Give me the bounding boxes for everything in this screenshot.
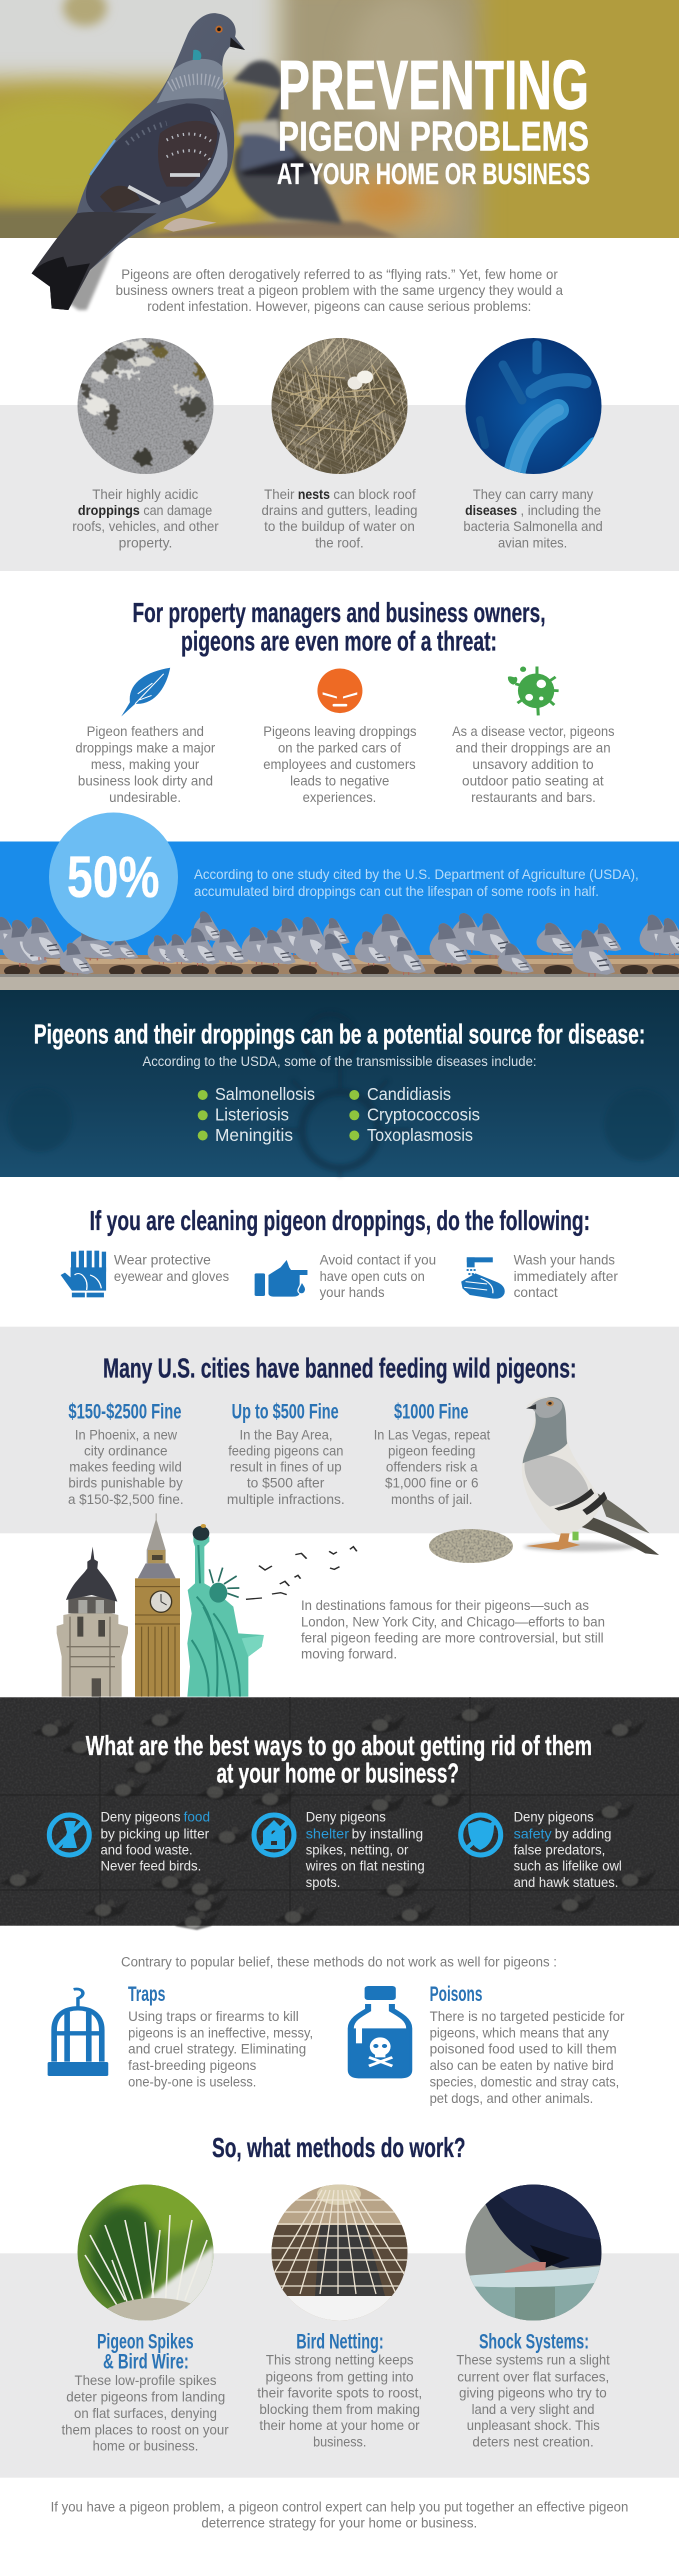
poisons text: There is no targeted pesticide for	[430, 2011, 625, 2025]
text: negative experiences: leads to negative	[290, 775, 390, 789]
text: bird netting: pigeons from getting into	[265, 2371, 414, 2385]
text: deny safety: false predators,	[514, 1844, 605, 1858]
text: deny food: Never feed birds.	[100, 1860, 201, 1874]
hero photo background	[0, 0, 679, 260]
photo: shock system	[465, 2184, 602, 2321]
traps text	[128, 2011, 313, 2091]
disease list: Candidiasis	[367, 1084, 451, 1104]
caption: diseases: diseases	[465, 505, 517, 519]
grey band	[0, 2253, 679, 2478]
seed pile	[428, 1528, 514, 1564]
panel: best ways to get rid of pigeons	[0, 1697, 679, 1930]
closing text: deterrence strategy for your home or business.	[201, 2517, 477, 2532]
text: deny food: food	[184, 1811, 210, 1826]
text: deny food: and food waste.	[100, 1844, 193, 1858]
caption: nests: Their	[264, 489, 295, 503]
text: negative experiences: experiences.	[303, 792, 376, 806]
text: USDA study	[194, 869, 639, 900]
text: mess	[75, 726, 216, 806]
text: mess: Pigeon feathers and	[87, 726, 204, 740]
text: mess: mess, making your	[91, 759, 200, 773]
text: pigeon spikes: on flat surfaces, denying	[74, 2408, 217, 2422]
text: bird netting: business.	[313, 2436, 366, 2450]
intro text: business owners treat a pigeon problem with the same urgency they would a	[116, 285, 563, 299]
text: mess: undesirable.	[109, 792, 181, 806]
panel: threat columns	[75, 667, 614, 806]
text: negative experiences: employees and customers	[263, 759, 416, 773]
heading: at your home or business?	[216, 1757, 459, 1788]
text: mess: droppings make a major	[75, 742, 216, 757]
text: deny shelter: Deny pigeons	[306, 1811, 386, 1826]
caption: droppings	[72, 489, 219, 551]
caption: diseases: bacteria Salmonella and	[463, 521, 603, 535]
main pigeon	[32, 13, 245, 310]
text: pigeon spikes: deter pigeons from landing	[66, 2391, 225, 2405]
text: famous destinations: feral pigeon feeding are more controversial, but still	[301, 1632, 604, 1646]
text: Phoenix: a $150-$2,500 fine.	[68, 1494, 184, 1508]
text: Bay Area: In the Bay Area,	[239, 1429, 333, 1443]
traps heading: Traps	[128, 1983, 165, 2006]
text: wash: immediately after	[514, 1271, 619, 1285]
panel: poisons	[351, 1983, 625, 2107]
text: pigeon spikes	[61, 2375, 229, 2454]
text: Phoenix: makes feeding wild	[69, 1461, 182, 1476]
text: famous destinations: London, New York City, and Chicago—efforts to ban	[301, 1616, 605, 1630]
caption: diseases: , including the	[521, 505, 601, 519]
text: wash: Wash your hands	[514, 1254, 615, 1268]
blue band	[0, 842, 679, 960]
text: Las Vegas: pigeon feeding	[388, 1445, 476, 1460]
text: deny safety: and hawk statues.	[514, 1877, 618, 1891]
traps text: Using traps or firearms to kill	[128, 2011, 299, 2025]
text: deny shelter	[304, 1811, 425, 1891]
text: disease vector: and their droppings are an	[456, 742, 611, 757]
text: Bay Area	[227, 1429, 345, 1508]
disease list: Salmonellosis	[215, 1084, 315, 1104]
poisons text: also can be eaten by native bird	[430, 2060, 614, 2074]
text: deny shelter: wires on flat nesting	[304, 1860, 425, 1874]
caption: nests: nests	[298, 489, 330, 503]
icon: pointing hand with cut	[255, 1260, 307, 1297]
panel: 50 percent stat band	[0, 812, 679, 990]
text: wash	[514, 1254, 619, 1301]
text: cuts: Avoid contact if you	[320, 1254, 436, 1268]
text: shock systems	[456, 2354, 610, 2450]
photo: nest with eggs	[272, 338, 408, 474]
text: Phoenix: city ordinance	[84, 1445, 168, 1460]
text: deny food	[100, 1811, 210, 1874]
caption: droppings: can damage	[143, 505, 212, 519]
panel: hero banner	[0, 0, 679, 310]
text: deny safety: by adding	[555, 1828, 612, 1842]
closing text	[51, 2501, 629, 2532]
panel: three serious problems	[0, 338, 679, 571]
icon: no safety	[461, 1815, 501, 1855]
stat: 50%: 50%	[67, 845, 160, 910]
text: pigeon spikes: them places to roost on your	[61, 2424, 229, 2438]
text: Bay Area: result in fines of up	[230, 1461, 342, 1476]
panel: disease	[0, 990, 679, 1177]
text: deny safety: safety	[514, 1828, 553, 1842]
text: gloves: eyewear and gloves	[114, 1271, 229, 1285]
dark pigeon photo background	[0, 1697, 679, 1930]
text: disease vector: restaurants and bars.	[471, 792, 596, 806]
icon: flock of birds	[246, 1547, 357, 1599]
caption: nests: can block roof	[333, 489, 416, 503]
disease list: Cryptococcosis	[367, 1104, 480, 1124]
subheading: According to the USDA, some of the transmissible diseases include:	[142, 1054, 536, 1069]
heading: pigeon spikes: Pigeon Spikes	[97, 2330, 194, 2353]
fine headings: Up to $500 Fine	[232, 1401, 339, 1424]
text: disease vector: unsavory addition to	[472, 759, 594, 773]
poisons text: species, domestic and stray cats,	[430, 2076, 619, 2091]
icon: no food	[49, 1815, 89, 1855]
text: USDA study: According to one study cited by the U.S. Department of Agriculture (USDA),	[194, 869, 639, 883]
text: deny safety	[514, 1811, 622, 1891]
panel: methods that work	[0, 2175, 679, 2478]
image: pigeon with seeds	[428, 1397, 659, 1564]
statue of liberty	[187, 1537, 263, 1697]
clock tower	[135, 1578, 180, 1697]
text: disease vector	[452, 726, 614, 806]
fine headings	[68, 1401, 469, 1424]
photo: bird netting	[272, 2184, 408, 2320]
text: Bay Area: feeding pigeons can	[228, 1445, 344, 1460]
text: Bay Area: multiple infractions.	[227, 1494, 345, 1508]
caption: nests: the roof.	[315, 537, 364, 551]
text: shock systems: giving pigeons who try to	[459, 2387, 607, 2402]
icon: washing hands	[461, 1257, 505, 1299]
poisons text	[430, 2011, 625, 2107]
text: bird netting	[257, 2354, 422, 2450]
traps text: pigeons is an ineffective, messy,	[128, 2027, 313, 2042]
image: landmarks	[57, 1513, 264, 1697]
grey band	[0, 1327, 679, 1533]
text: cuts: have open cuts on	[320, 1271, 425, 1285]
heading: pigeon spikes: & Bird Wire:	[103, 2351, 189, 2374]
text: shock systems: These systems run a slight	[456, 2354, 610, 2369]
caption: droppings: droppings	[78, 505, 140, 519]
text: cuts	[320, 1254, 436, 1301]
icon: feather	[121, 668, 170, 717]
text: disease vector: outdoor patio seating at	[462, 775, 604, 789]
text: mess: business look dirty and	[78, 775, 213, 789]
text: famous destinations: moving forward.	[301, 1648, 397, 1662]
disease list: Meningitis	[215, 1125, 293, 1145]
text: Bay Area: to $500 after	[247, 1477, 325, 1492]
fine headings: $150-$2500 Fine	[68, 1401, 181, 1424]
title: PIGEON PROBLEMS	[278, 112, 589, 160]
intro text: rodent infestation. However, pigeons can cause serious problems:	[147, 301, 531, 315]
intro text: Pigeons are often derogatively referred to as “flying rats.” Yet, few home or	[121, 269, 558, 283]
icon: gloves	[61, 1251, 106, 1297]
text: cuts: your hands	[320, 1287, 385, 1301]
text: shock systems: unpleasant shock. This	[467, 2420, 600, 2434]
disease list: Toxoplasmosis	[367, 1125, 473, 1145]
closing text: If you have a pigeon problem, a pigeon control expert can help you put together an effective pigeon	[51, 2501, 629, 2515]
text: famous destinations: In destinations famous for their pigeons—such as	[301, 1600, 589, 1614]
title	[277, 46, 590, 191]
text: shock systems: deters nest creation.	[472, 2436, 594, 2450]
icon: virus	[508, 667, 559, 715]
text: contrary to popular belief: Contrary to popular belief, these methods do not work as well for pigeons :	[121, 1955, 557, 1970]
caption: droppings: Their highly acidic	[92, 489, 198, 503]
intro text	[116, 269, 563, 315]
text: Las Vegas: offenders risk a	[386, 1461, 478, 1476]
text: Phoenix: In Phoenix, a new	[75, 1429, 178, 1443]
text: deny shelter: spots.	[306, 1877, 340, 1891]
traps text: one-by-one is useless.	[128, 2076, 256, 2091]
dark background	[0, 990, 679, 1177]
text: gloves: Wear protective	[114, 1254, 211, 1268]
heading: property managers: pigeons are even more of a threat:	[181, 625, 497, 656]
text: deny food: by picking up litter	[100, 1828, 210, 1842]
poisons text: pigeons, which means that any	[430, 2027, 610, 2042]
icon: no shelter	[254, 1815, 294, 1855]
stone tower	[57, 1608, 128, 1697]
traps text: fast-breeding pigeons	[128, 2060, 256, 2074]
photo: droppings	[77, 338, 214, 474]
text: deny shelter: spikes, netting, or	[306, 1844, 409, 1858]
text: Las Vegas: In Las Vegas, repeat	[374, 1429, 490, 1443]
text: pigeon spikes: These low-profile spikes	[74, 2375, 217, 2389]
text: Las Vegas: months of jail.	[391, 1494, 472, 1508]
text: shock systems: land a very slight and	[472, 2404, 595, 2418]
blurred background pigeon	[233, 61, 342, 224]
panel: traps	[48, 1983, 313, 2091]
text: shock systems: current over flat surfaces,	[457, 2371, 609, 2385]
text: USDA study: accumulated bird droppings can cut the lifespan of some roofs in half.	[194, 885, 599, 900]
text: negative experiences: Pigeons leaving droppings	[263, 726, 417, 740]
grey band	[0, 405, 679, 571]
caption: nests: to the buildup of water on	[264, 521, 415, 535]
poisons text: pet dogs, and other animals.	[430, 2093, 593, 2107]
text: pigeon spikes: home or business.	[93, 2440, 198, 2454]
text: negative experiences: on the parked cars of	[278, 742, 401, 757]
text: deny shelter: shelter	[306, 1828, 350, 1842]
pigeon	[522, 1397, 659, 1555]
disease list	[198, 1084, 480, 1145]
text: bird netting: blocking them from making	[259, 2404, 420, 2418]
poisons heading: Poisons	[430, 1983, 482, 2006]
text: Phoenix: birds punishable by	[68, 1477, 184, 1492]
fine headings: $1000 Fine	[394, 1401, 469, 1424]
text: famous destinations	[301, 1600, 605, 1662]
text: deny safety: such as lifelike owl	[514, 1860, 622, 1874]
text: negative experiences	[263, 726, 417, 806]
text: disease vector: As a disease vector, pigeons	[452, 726, 614, 740]
caption: droppings: roofs, vehicles, and other	[72, 521, 219, 535]
heading: bird netting: Bird Netting:	[296, 2330, 384, 2353]
text: Phoenix	[68, 1429, 184, 1508]
caption: diseases: avian mites.	[498, 537, 567, 551]
text: wash: contact	[514, 1287, 558, 1301]
heading: what works: So, what methods do work?	[212, 2132, 466, 2163]
caption: diseases	[463, 489, 603, 551]
text: bird netting: This strong netting keeps	[266, 2354, 414, 2369]
caption: nests: drains and gutters, leading	[262, 505, 418, 519]
caption: diseases: They can carry many	[473, 489, 594, 503]
text: gloves	[114, 1254, 229, 1285]
heading: shock systems: Shock Systems:	[479, 2330, 589, 2353]
heading	[86, 1730, 592, 1788]
icon: poison bottle	[351, 1986, 409, 2076]
icon: angry face	[317, 668, 362, 713]
icon: cage	[48, 1989, 108, 2076]
text: Las Vegas: $1,000 fine or 6	[385, 1477, 479, 1492]
photo: pigeon spikes	[78, 2184, 214, 2320]
text: deny shelter: by installing	[352, 1828, 423, 1842]
text: bird netting: their home at your home or	[259, 2420, 420, 2434]
panel: cleaning steps	[61, 1251, 619, 1301]
caption: nests	[262, 489, 418, 551]
stat circle	[49, 812, 178, 942]
text: Las Vegas	[374, 1429, 490, 1508]
disease list: Listeriosis	[215, 1104, 289, 1124]
heading: pigeon spikes	[97, 2330, 194, 2374]
caption: droppings: property.	[119, 537, 172, 551]
virus decoration	[8, 1014, 676, 1176]
heading: property managers	[132, 597, 546, 656]
poisons text: poisoned food used to kill them	[430, 2043, 617, 2058]
panel: feeding bans	[0, 1327, 679, 1697]
text: deny food: Deny pigeons	[100, 1811, 181, 1826]
text: bird netting: their favorite spots to roost,	[257, 2387, 422, 2402]
photo: bacteria	[465, 338, 602, 475]
traps text: and cruel strategy. Eliminating	[128, 2043, 306, 2058]
text: deny safety: Deny pigeons	[514, 1811, 594, 1826]
photo: pigeons on roof	[0, 911, 679, 990]
